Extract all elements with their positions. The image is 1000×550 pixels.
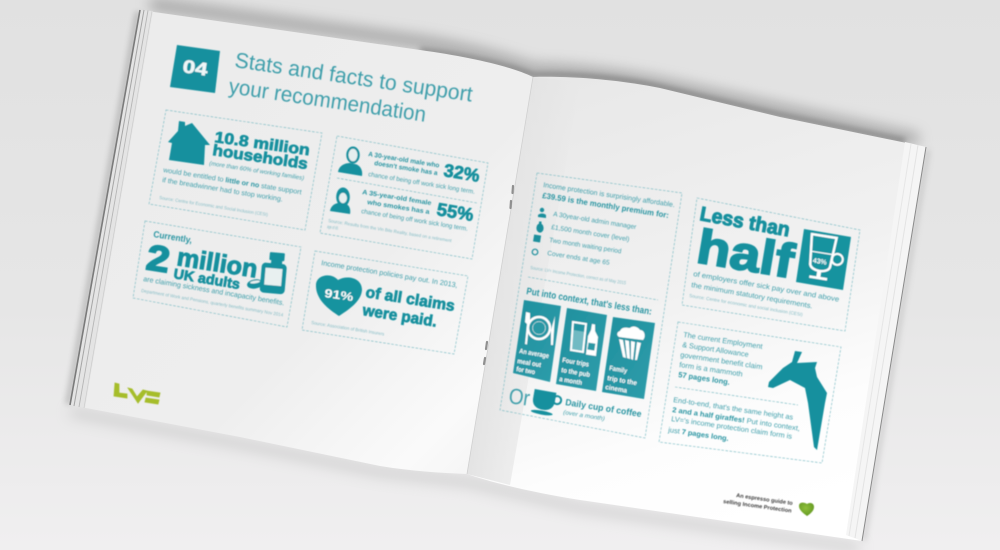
headline: 10.8 million xyxy=(213,129,311,159)
headline: of all claims xyxy=(364,284,456,315)
tile: cinema trip: cinema xyxy=(605,384,628,395)
text: benefit form xyxy=(678,330,763,387)
body text: are claiming sickness and incapacity benefits. xyxy=(143,274,285,307)
stat: male 32% xyxy=(368,151,481,196)
footer tagline: selling Income Protection xyxy=(723,499,792,515)
logo: LV= xyxy=(114,383,160,404)
tile: cinema trip: Family xyxy=(609,365,628,375)
panel: right page xyxy=(467,77,926,541)
panel: left page xyxy=(70,10,533,474)
title: Stats and facts to support xyxy=(233,48,474,107)
body text: would be entitled to little or no state support xyxy=(162,167,302,196)
panel: giraffe fact xyxy=(659,322,841,463)
panel: less than half xyxy=(682,198,860,331)
coffee row: Or xyxy=(507,383,532,411)
icon: heart with 91% xyxy=(316,275,362,316)
binding staples xyxy=(484,186,513,364)
page stack right edge xyxy=(846,142,926,541)
panel: sick leave chance xyxy=(320,136,488,259)
body text xyxy=(159,161,304,217)
headline xyxy=(211,129,311,173)
headline: 2 xyxy=(144,236,173,280)
text: benefit form: form is a mammoth xyxy=(679,360,743,379)
list with icons: Two month waiting period xyxy=(549,237,622,255)
icon: giraffe xyxy=(768,351,827,450)
tile: cinema trip: trip to the xyxy=(607,375,638,387)
headline: households xyxy=(211,142,309,173)
stat: female 55%: 55% xyxy=(435,199,475,225)
icon: pill bottle xyxy=(259,251,288,294)
tile: meal out: meal out xyxy=(517,358,542,369)
stat: male 32%: doesn't smoke has a xyxy=(374,160,438,177)
text: benefit form: The current Employment xyxy=(683,330,763,351)
icon: house xyxy=(168,121,210,165)
stat: male 32%: A 30-year-old male who xyxy=(368,151,440,169)
headline: Less than xyxy=(698,203,792,241)
tile: trips to the pub: to the pub xyxy=(561,367,590,379)
tile: meal out: An average xyxy=(519,348,550,360)
section number badge xyxy=(170,45,220,93)
text: benefit form: & Support Allowance xyxy=(682,340,749,359)
stat: female 55%: age of 65 xyxy=(327,224,339,231)
text: benefit form: 57 pages long. xyxy=(678,370,730,387)
stat: female 55% xyxy=(327,189,475,243)
stat: male 32%: 32% xyxy=(442,160,481,186)
coffee row: Daily cup of coffee xyxy=(565,397,642,419)
source: Source: Association of British Insurers xyxy=(311,320,385,337)
panel: 10.8 million households xyxy=(149,110,322,230)
icon: green heart xyxy=(799,503,814,516)
footer tagline xyxy=(723,493,794,515)
panel: 91% of claims paid xyxy=(302,251,468,354)
body text: if the breadwinner had to stop working. xyxy=(162,177,283,203)
body text: Source: Centre for economic and social inclusion (CESI) xyxy=(689,293,804,317)
intro text: Income protection is surprisingly affordable. xyxy=(543,182,675,209)
tile: trips to the pub: a month xyxy=(559,376,583,387)
panel: affordability and context xyxy=(500,173,682,438)
headline: Currently, xyxy=(153,229,193,245)
stat: female 55%: who smokes has a xyxy=(366,199,430,216)
tile: meal out: for two xyxy=(516,366,536,376)
tile: trips to the pub: Four trips xyxy=(562,357,590,369)
list with icons: Source: LV= Income Protection, correct as of May 2015 xyxy=(530,265,627,286)
headline xyxy=(693,203,799,289)
text: giraffe comparison: just 7 pages long. xyxy=(667,425,729,443)
section number badge: 04 xyxy=(181,56,209,80)
list with icons xyxy=(530,208,638,286)
tile: cinema trip xyxy=(602,317,655,399)
intro text: £39.59 is the monthly premium for: xyxy=(542,191,670,220)
headline: were paid. xyxy=(360,302,438,331)
body text: Source: Centre for Economic and Social Inclusion (CESI) xyxy=(159,195,269,217)
headline xyxy=(144,229,259,292)
title: your recommendation xyxy=(227,74,428,127)
text: giraffe comparison: End-to-end, that's the same height as xyxy=(673,395,794,422)
stat: female 55%: A 35-year-old female xyxy=(362,189,432,207)
spine line xyxy=(467,77,533,474)
headline xyxy=(360,284,456,331)
text: giraffe comparison: 2 and a half giraffes! Put into context, xyxy=(672,405,801,433)
page stack left edge xyxy=(70,10,153,408)
list with icons: Cover ends at age 65 xyxy=(547,250,610,267)
stat: male 32%: chance of being off work sick long term. xyxy=(368,171,476,196)
headline: UK adults xyxy=(173,265,241,292)
body text: (more than 60% of working families) xyxy=(209,161,304,182)
footer tagline: An espresso guide to xyxy=(736,493,794,507)
panel: 2 million UK adults xyxy=(133,221,301,327)
tile: meal out xyxy=(513,300,561,382)
body text: of employers offer sick pay over and above xyxy=(693,269,840,304)
list with icons: £1,500 month cover (level) xyxy=(551,224,630,243)
coffee row xyxy=(507,383,642,423)
text: giraffe comparison xyxy=(667,395,801,443)
icon: heart with 91%: 91% xyxy=(324,286,355,304)
heading: put into context: Put into context, that's less than: xyxy=(526,286,653,318)
icon: female xyxy=(330,188,350,214)
text: benefit form: government benefit claim xyxy=(680,350,763,371)
text: giraffe comparison: LV='s income protection claim form is xyxy=(671,414,793,441)
body text: Department of Work and Pensions, quarterly benefits summary Nov 2014 xyxy=(141,288,284,318)
stat: female 55%: Source: Results from the Vin Bite Reality, based on a retirement xyxy=(328,218,453,243)
body text: the minimum statutory requirements. xyxy=(691,280,813,310)
list with icons: A 30year-old admin manager xyxy=(553,211,638,231)
coffee row: (over a month) xyxy=(563,410,605,423)
icon: mug with 43%: 43% xyxy=(812,258,828,267)
headline: half xyxy=(693,221,799,289)
body text xyxy=(689,269,840,317)
stat: female 55%: chance of being off work sick long term. xyxy=(361,208,469,233)
icon: male xyxy=(338,148,362,176)
headline: million xyxy=(175,243,259,284)
icon: mug with 43% xyxy=(796,229,851,290)
intro text: Income protection policies pay out. In 2013, xyxy=(321,258,458,290)
icon: pills xyxy=(246,278,264,290)
tile: trips to the pub xyxy=(556,308,607,391)
